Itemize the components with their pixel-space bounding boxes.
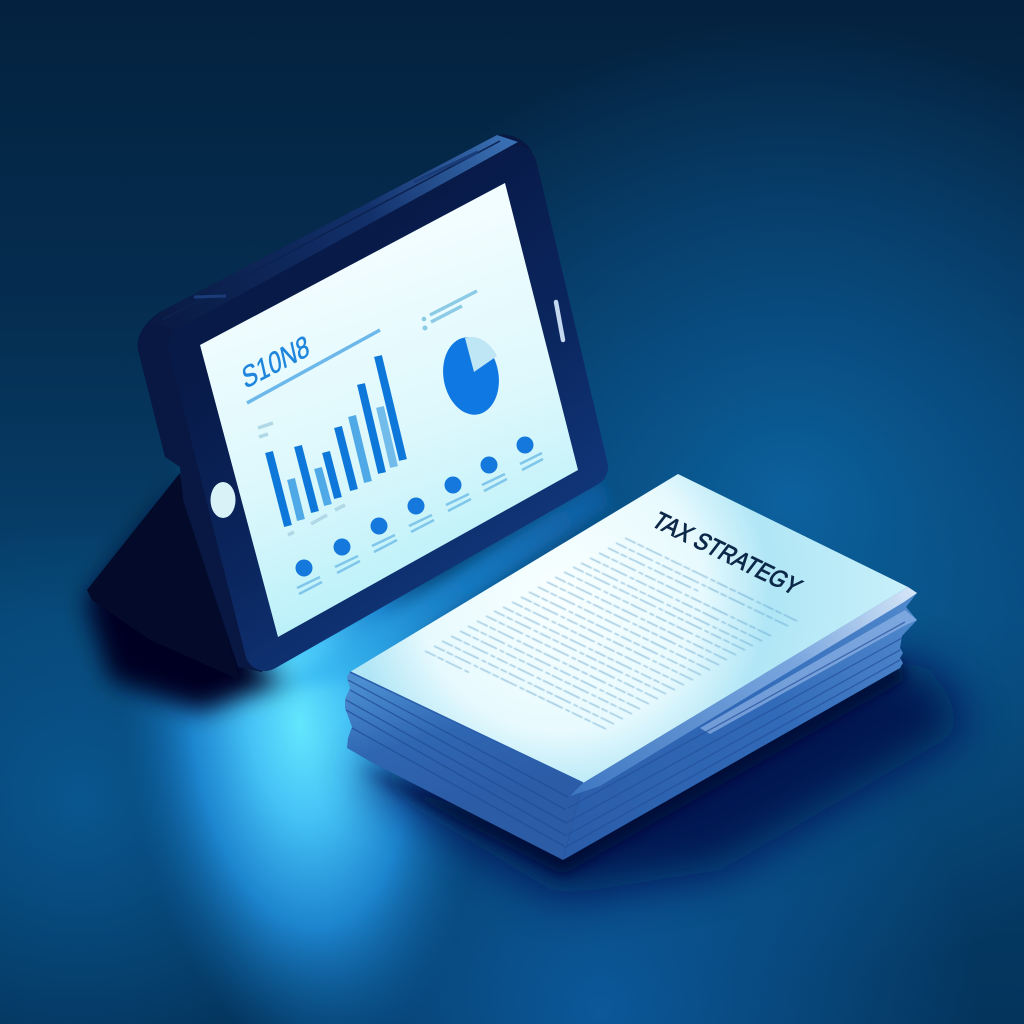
light strip between tablet and documents [270, 480, 610, 690]
bar chart [269, 356, 403, 526]
document stack [345, 474, 917, 860]
home button [210, 482, 236, 518]
top right legend [422, 291, 477, 330]
third sheet light edge [700, 610, 917, 734]
tablet [87, 135, 588, 680]
document contact shadow [358, 660, 905, 875]
screen title: S10N8 [239, 329, 312, 396]
stack side face [563, 587, 917, 860]
title underline [247, 330, 380, 403]
tablet screen [200, 183, 578, 637]
tablet stand [87, 473, 240, 680]
tablet back casing [138, 135, 532, 672]
chart small labels [258, 423, 345, 535]
row of metric dots [296, 436, 534, 576]
tablet front body [188, 166, 588, 651]
tablet top rim [150, 135, 518, 330]
tablet shadow [85, 480, 290, 712]
speaker slot [556, 302, 563, 340]
metric labels [297, 453, 543, 594]
document stack shadow [352, 660, 970, 895]
sheet edges side [564, 622, 905, 848]
document title: TAX STRATEGY [646, 508, 807, 600]
document body text lines [425, 538, 797, 729]
stack front face [345, 672, 583, 860]
sheet edges front [346, 680, 568, 846]
pie chart [437, 333, 505, 419]
sheet fold shadow [350, 672, 583, 783]
top sheet [350, 474, 908, 783]
side buttons [194, 152, 478, 297]
second sheet light edge [570, 587, 917, 796]
rim groove [162, 141, 500, 320]
